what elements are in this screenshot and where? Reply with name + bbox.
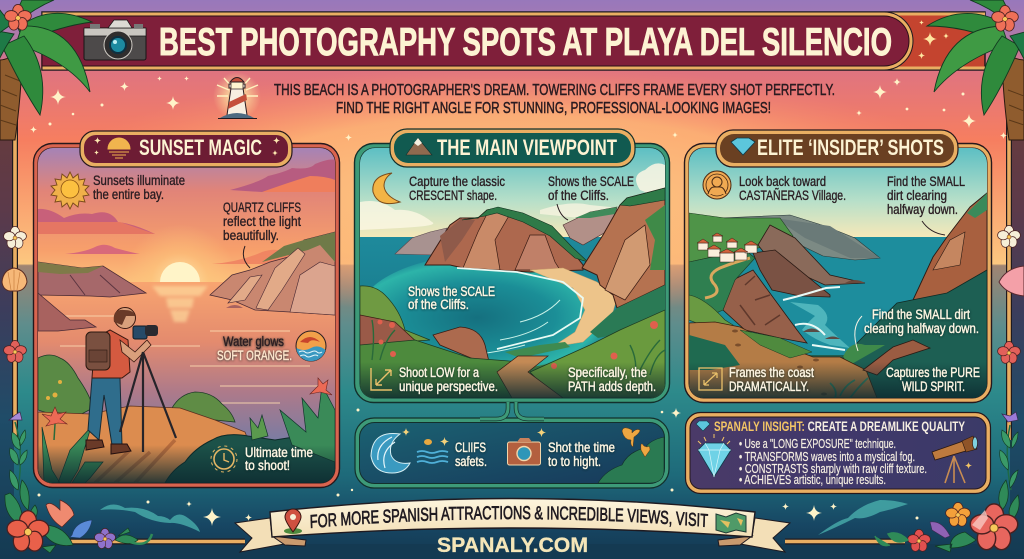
heading pill: sunset magic: SUNSET MAGIC [139, 135, 262, 160]
intro text: FIND THE RIGHT ANGLE FOR STUNNING, PROFESSIONAL-LOOKING IMAGES! [336, 100, 771, 117]
text: frames the coast: DRAMATICALLY. [729, 379, 809, 394]
right vine and corner bouquet [875, 412, 1019, 552]
background sparkles [30, 76, 1007, 531]
text: quartz cliffs [223, 200, 301, 243]
text: captures wild spirit: Captures the PURE [886, 365, 980, 380]
text: sunsets illuminate: the entire bay. [93, 187, 164, 202]
text: ultimate time: to shoot! [245, 458, 290, 473]
text: frames the coast [729, 365, 814, 394]
arrow: clearing pointer top [922, 221, 945, 235]
icon: perspective arrows [371, 368, 392, 390]
text: capture the crescent: CRESCENT shape. [409, 188, 497, 203]
text: water glows: SOFT ORANGE. [217, 348, 292, 363]
text: find the small on cliff: Find the SMALL dirt [872, 307, 970, 322]
text: find the small top: dirt clearing [887, 188, 947, 203]
panel: the main viewpoint [354, 144, 670, 402]
text: path adds depth: PATH adds depth. [568, 379, 656, 394]
text: shoot low [399, 365, 498, 394]
teal wispy clouds lower band [100, 500, 908, 535]
text: capture the crescent [409, 174, 505, 203]
sunset scene illustration [38, 148, 335, 483]
ribbon text: FOR MORE SPANISH ATTRACTIONS & INCREDIBLE VIEWS, VISIT [310, 506, 708, 528]
insight bullet list: • Use a "LONG EXPOSURE" technique. [739, 437, 896, 451]
icon: camera small [508, 438, 540, 465]
insight bullet list: • ACHIEVES artistic, unique results. [739, 473, 886, 487]
left vine and corner bouquet [5, 412, 152, 553]
insight bullet list: • CONSTRASTS sharply with raw cliff texture. [739, 462, 927, 476]
ribbon tails [235, 518, 790, 552]
heading pill: the main viewpoint [390, 129, 635, 167]
text: look back toward [739, 174, 846, 203]
text: shoot low: Shoot LOW for a [399, 365, 479, 380]
text: captures wild spirit [886, 365, 980, 394]
text: shot the time [548, 440, 615, 469]
icon: map [716, 513, 746, 533]
text: quartz cliffs: reflect the light [223, 214, 301, 229]
heading pill: the main viewpoint: THE MAIN VIEWPOINT [437, 135, 617, 160]
text: find the small top [887, 174, 965, 217]
icon: butterflies [622, 428, 650, 457]
icon: wave [371, 433, 410, 473]
arrow: quartz cliffs pointer [243, 246, 250, 268]
photographer figure with tripod [86, 308, 176, 454]
text: look back toward: Look back toward [739, 174, 826, 189]
heading pill: elite insider shots [716, 130, 958, 167]
insider scene illustration [689, 148, 987, 398]
icon: large diamond [698, 434, 731, 477]
icon: camera [84, 20, 146, 60]
text: captures wild spirit: WILD SPIRIT. [902, 379, 965, 394]
text: shows the scale on water: Shows the SCALE [408, 284, 495, 299]
text: shows the scale top [548, 174, 634, 203]
text: shows the scale on water: of the Cliffs. [408, 297, 469, 312]
text: quartz cliffs: beautifully. [223, 228, 279, 243]
connector between panels [480, 402, 544, 419]
text: find the small top: Find the SMALL [887, 174, 965, 189]
left palm tree [0, 0, 92, 140]
text: sunsets illuminate: Sunsets illuminate [93, 173, 185, 188]
text: ultimate time [245, 445, 313, 473]
panel: spanaly insight [686, 412, 990, 494]
title banner [42, 12, 985, 70]
icon: clock [211, 446, 237, 472]
text: capture the crescent: Capture the classic [409, 174, 505, 189]
text: cliffs safets: safets. [455, 454, 487, 469]
text: shows the scale on water [408, 284, 495, 312]
text: frames the coast: Frames the coast [729, 365, 814, 380]
text: cliffs safets: CLIIFS [455, 440, 486, 455]
panel: sunset magic [34, 144, 340, 488]
text: water glows [217, 334, 292, 363]
text: ultimate time: Ultimate time [245, 445, 313, 460]
icon: lighthouse [213, 72, 261, 120]
text: find the small top: halfway down. [887, 202, 958, 217]
text: shoot low: unique perspective. [399, 379, 498, 394]
intro text [274, 82, 835, 117]
intro text: THIS BEACH IS A PHOTOGRAPHER'S DREAM. TOWERING CLIFFS FRAME EVERY SHOT PERFECTLY. [274, 82, 835, 99]
text: shows the scale top: of the Cliffs. [548, 188, 609, 203]
footer ribbon [234, 498, 791, 553]
icon: map pin [284, 509, 302, 534]
icon: water badge [296, 331, 326, 361]
icon: sun [51, 172, 89, 209]
text: cliffs safets [455, 440, 487, 469]
viewpoint scene illustration [360, 148, 665, 398]
text: quartz cliffs: QUARTZ CLIFFS [223, 200, 301, 215]
insight bullet list [739, 437, 927, 487]
arrow: scale pointer [557, 204, 568, 220]
heading pill: sunset magic [80, 131, 292, 167]
panel: bottom viewpoint strip [355, 418, 669, 488]
insight bullet list: • TRANSFORMS waves into a mystical fog. [739, 450, 915, 464]
text: path adds depth [568, 365, 656, 394]
text: sunsets illuminate [93, 173, 185, 202]
text: shot the time: to to hight. [548, 454, 601, 469]
icon: person badge [703, 171, 731, 199]
icon: telescope [932, 436, 978, 483]
text: find the small on cliff: clearing halfway down. [864, 321, 979, 336]
icon: small diamond [696, 421, 710, 431]
left side decorations [2, 226, 27, 362]
right side decorations [998, 225, 1024, 363]
banner sparkles [918, 20, 949, 59]
website url: SPANALY.COM [437, 534, 588, 557]
text: shows the scale top: Shows the SCALE [548, 174, 634, 189]
arrow: clearing pointer lower [855, 316, 862, 351]
icon: frame arrow [699, 368, 722, 390]
heading pill: elite insider shots: ELITE ‘INSIDER’ SHOTS [757, 135, 944, 160]
icon: crescent moon [373, 173, 400, 204]
bush corner [598, 437, 664, 483]
text: look back toward: CASTAÑERAS Village. [739, 188, 846, 203]
right palm tree [927, 0, 1024, 140]
text: water glows: Water glows [223, 334, 284, 349]
text: find the small on cliff [864, 307, 979, 336]
icon: sun and waves [417, 437, 449, 463]
insight heading: SPANALY INSIGHT: CREATE A DREAMLIKE QUALITY [714, 419, 965, 434]
text: path adds depth: Specifically, the [568, 365, 647, 380]
panel: elite insider shots [684, 144, 992, 402]
text: shot the time: Shot the time [548, 440, 615, 455]
